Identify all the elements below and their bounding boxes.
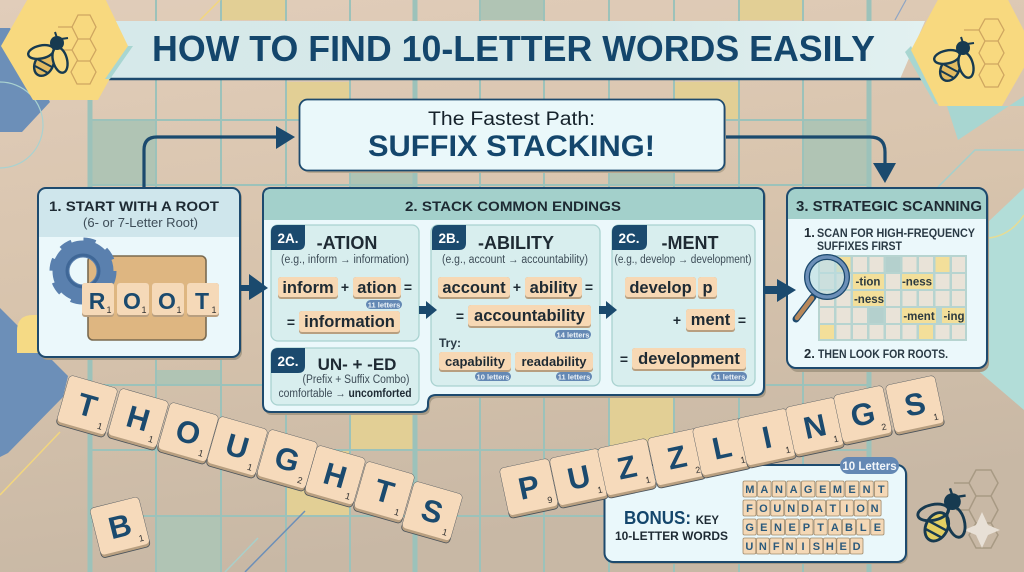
tiles: THOUGHTS: 1 (147, 434, 155, 445)
title banner (108, 21, 925, 79)
word tiles: management: A (790, 484, 798, 496)
tiles: THOUGHTS: T (370, 472, 398, 511)
sub-panel 2C: -ment: 11 letters (713, 372, 745, 382)
root letter tiles: O (158, 288, 176, 314)
step 1 text: SUFFIXES FIRST (817, 241, 902, 253)
tiles: THOUGHTS: S (417, 492, 447, 531)
arrow: step 1 to step 2 (240, 274, 268, 300)
sub-panel 2C: un- + -ed: (Prefix + Suffix Combo) (302, 374, 410, 386)
root letter tiles: 1 (106, 305, 112, 315)
sub-panel 2A: -ation: 11 letters (368, 300, 400, 310)
tiles: PUZZLINGS: 1 (832, 433, 839, 444)
sub-panel 2B: -ability: readability (521, 354, 587, 369)
step 2 text (804, 346, 948, 361)
icon: bottom right bee with honeycomb (916, 470, 1000, 548)
word tiles: geneptable: E (789, 522, 796, 534)
root letter tiles: R (89, 288, 106, 314)
tiles: THOUGHTS: H (123, 399, 154, 438)
word tiles: unfnished: D (853, 541, 861, 553)
bonus heading: BONUS: KEY (624, 508, 719, 528)
panel: 2 stack common endings (263, 188, 766, 415)
tile: B (90, 497, 151, 558)
word tiles: unfnished: S (813, 541, 820, 553)
tiles: THOUGHTS: 1 (344, 491, 352, 502)
tiles: PUZZLINGS: 1 (644, 474, 651, 485)
sub-panel 2B: -ability: 10 letters (477, 372, 509, 382)
tiles: PUZZLINGS (499, 375, 945, 519)
tiles: THOUGHTS: T (73, 386, 101, 425)
sub-panel 2C: -ment: + (673, 312, 681, 328)
tile: B: B (105, 507, 135, 546)
tiles: THOUGHTS: 1 (96, 421, 104, 432)
icon: magnifying glass (796, 257, 847, 319)
tiles: PUZZLINGS: 1 (596, 484, 603, 495)
root letter tiles: 1 (211, 305, 217, 315)
sub-panel 2C: -ment: = (620, 351, 628, 367)
letter grid: -tion (856, 276, 880, 288)
sub-panel 2A: -ation: (e.g., inform → information) (281, 254, 409, 266)
sub-panel 2C: un- + -ed: UN- + -ED (318, 355, 396, 374)
word tiles: unfnished: F (773, 541, 780, 553)
panel 2 heading: 2. STACK COMMON ENDINGS (405, 198, 621, 214)
sub-panel 2B: -ability: 2B. (438, 231, 460, 246)
word tiles: management: E (848, 484, 856, 496)
tiles: THOUGHTS: 1 (197, 448, 205, 459)
word tiles: geneptable: B (845, 522, 853, 534)
icon: gear (53, 241, 113, 301)
word tiles: geneptable: N (774, 522, 782, 534)
sub-panel 2C: -ment: develop (629, 279, 692, 297)
panel 3 heading: 3. STRATEGIC SCANNING (796, 198, 982, 215)
10 letters tab (840, 457, 899, 474)
word tiles: unfnished: I (801, 541, 805, 553)
step 2 text: 2. (804, 346, 815, 361)
letter grid: -ness (854, 294, 884, 306)
tiles: PUZZLINGS: 2 (880, 421, 887, 432)
tiles: PUZZLINGS: 1 (932, 411, 939, 422)
sub-panel 2A: -ation: -ATION (317, 233, 377, 253)
sub-panel 2B: -ability (431, 225, 600, 386)
tiles: PUZZLINGS: N (800, 407, 829, 446)
letter grid (818, 255, 967, 341)
word tiles: foundation: I (845, 503, 848, 515)
sub-panel 2C: -ment: 2C. (618, 231, 640, 246)
sub-panel 2B: -ability: capability (445, 354, 506, 369)
sub-panel 2B: -ability: account (442, 279, 506, 297)
word tiles: management: M (745, 484, 754, 496)
sub-panel 2B: -ability: accountability (474, 307, 586, 325)
sub-panel 2C: un- + -ed (271, 348, 419, 405)
word tiles: foundation: O (759, 503, 768, 515)
word tiles: geneptable: L (860, 522, 867, 534)
step 1 text (804, 225, 975, 253)
sub-panel 2C: -ment: (e.g., develop → development) (614, 254, 752, 266)
sub-panel 2C: -ment: development (638, 350, 740, 368)
root letter tiles: O (123, 288, 141, 314)
root letter tiles: 1 (176, 305, 182, 315)
tile: B: 1 (138, 533, 145, 544)
word tiles: foundation (743, 500, 881, 516)
tiles: THOUGHTS: 1 (441, 527, 449, 538)
arrow: 2B to 2C (599, 301, 617, 319)
word tiles: geneptable: E (874, 522, 881, 534)
word tiles: unfnished: E (840, 541, 847, 553)
letter grid: -ing (943, 311, 965, 323)
tiles: PUZZLINGS: S (901, 385, 929, 424)
word tiles: management: E (819, 484, 826, 496)
word tiles: management: M (833, 484, 842, 496)
callout heading: SUFFIX STACKING! (368, 130, 655, 163)
tiles: PUZZLINGS: U (564, 458, 593, 497)
word tiles: management: N (775, 484, 783, 496)
tiles: PUZZLINGS: 2 (694, 464, 701, 475)
callout subtitle: The Fastest Path: (428, 109, 595, 130)
sub-panel 2A: -ation: information (304, 313, 395, 331)
sub-panel 2B: -ability: = (456, 308, 464, 324)
root letter tiles: T (195, 288, 209, 314)
word tiles: unfnished: N (759, 541, 767, 553)
sub-panel 2A: -ation: ation (357, 279, 397, 297)
wood board (88, 256, 206, 340)
word tiles: unfnished: U (745, 541, 753, 553)
word tiles: foundation: T (830, 503, 837, 515)
tiles: PUZZLINGS: 1 (739, 454, 746, 465)
tiles: PUZZLINGS: Z (664, 438, 690, 477)
root letter tiles (82, 283, 219, 317)
word tiles: unfnished: N (786, 541, 794, 553)
word tiles: management: T (878, 484, 885, 496)
sub-panel 2A: -ation: = (404, 279, 412, 295)
tiles: THOUGHTS: G (271, 439, 304, 480)
bonus subheading: 10-LETTER WORDS (615, 529, 728, 543)
word tiles: geneptable: A (831, 522, 839, 534)
panel: bonus key words (604, 457, 908, 564)
word tiles: unfnished (743, 538, 863, 554)
sub-panel 2A: -ation: 2A. (277, 231, 299, 246)
sub-panel 2C: -ment (612, 225, 755, 386)
arrow: fastest path to scanning (725, 137, 896, 183)
tiles: THOUGHTS: H (320, 456, 351, 495)
sub-panel 2C: un- + -ed: 2C. (277, 354, 299, 369)
sub-panel 2C: un- + -ed: comfortable → uncomforted (278, 388, 412, 400)
panel: 3 strategic scanning (787, 188, 989, 372)
panel 1 heading: 1. START WITH A ROOT (49, 198, 219, 214)
sub-panel 2B: -ability: = (585, 279, 593, 295)
step 2 text: THEN LOOK FOR ROOTS. (818, 349, 948, 361)
panel: 1 start with a root (38, 188, 242, 360)
tiles: THOUGHTS (56, 375, 463, 544)
root letter tiles: 1 (141, 305, 147, 315)
sub-panel 2A: -ation: inform (282, 279, 334, 297)
step 1 text: 1. (804, 225, 815, 240)
arrow: root to fastest path (144, 126, 295, 187)
word tiles: foundation: U (773, 503, 781, 515)
arrow: 2A to 2B (419, 301, 437, 319)
icon: right bee hexagon (905, 0, 1024, 106)
word tiles: geneptable: E (760, 522, 767, 534)
word tiles: geneptable: T (817, 522, 824, 534)
sub-panel 2B: -ability: Try: (439, 336, 461, 350)
word tiles: foundation: N (787, 503, 795, 515)
tiles: PUZZLINGS: G (847, 395, 878, 434)
sub-panel 2B: -ability: + (513, 279, 521, 295)
panel 1 subheading: (6- or 7-Letter Root) (83, 215, 198, 230)
step 1 text: SCAN FOR HIGH-FREQUENCY (817, 228, 975, 240)
tiles: THOUGHTS: 2 (296, 475, 304, 486)
tiles: PUZZLINGS: L (709, 428, 735, 467)
tiles: PUZZLINGS: P (515, 468, 543, 507)
sub-panel 2C: -ment: = (738, 312, 746, 328)
word tiles: foundation: A (815, 503, 823, 515)
letter grid: -ness (902, 276, 932, 288)
sub-panel 2B: -ability: (e.g., account → accountability) (442, 254, 588, 266)
word tiles: unfnished: H (826, 541, 834, 553)
word tiles: foundation: F (746, 503, 753, 515)
word tiles: geneptable: P (803, 522, 810, 534)
word tiles: management: A (760, 484, 768, 496)
tiles: THOUGHTS: U (222, 427, 253, 466)
sub-panel 2B: -ability: ability (530, 279, 578, 297)
word tiles: foundation: O (856, 503, 865, 515)
tiles: THOUGHTS: 1 (393, 507, 401, 518)
10 letters tab: 10 Letters (842, 461, 897, 473)
sub-panel 2C: -ment: p (702, 279, 713, 297)
sub-panel 2C: -ment: -MENT (662, 233, 718, 253)
sub-panel 2C: -ment: ment (691, 311, 731, 329)
word tiles: geneptable: G (745, 522, 754, 534)
sub-panel 2B: -ability: -ABILITY (478, 233, 554, 253)
callout: the fastest path (300, 100, 726, 173)
tiles: THOUGHTS: O (172, 412, 205, 453)
word tiles: management: N (863, 484, 871, 496)
tiles: PUZZLINGS: I (759, 419, 775, 456)
arrow: step 2 to step 3 (764, 279, 796, 302)
sub-panel 2A: -ation (271, 225, 419, 341)
sub-panel 2A: -ation: = (287, 314, 295, 330)
tiles: PUZZLINGS: 1 (784, 444, 791, 455)
letter grid: -ment (903, 311, 935, 323)
sub-panel 2B: -ability: 11 letters (558, 372, 590, 382)
decorative colour shapes (0, 28, 1024, 457)
tiles: PUZZLINGS: 9 (546, 494, 553, 505)
tiles: THOUGHTS: 1 (246, 462, 254, 473)
icon: left bee hexagon (1, 0, 133, 100)
word tiles: management (743, 481, 888, 497)
word tiles: management: G (804, 484, 812, 496)
word tiles: foundation: N (871, 503, 879, 515)
sub-panel 2B: -ability: 14 letters (557, 330, 589, 340)
word tiles: geneptable (743, 519, 884, 535)
word tiles: foundation: D (801, 503, 809, 515)
title: HOW TO FIND 10-LETTER WORDS EASILY (152, 28, 875, 69)
tiles: PUZZLINGS: Z (614, 448, 640, 487)
sub-panel 2A: -ation: + (341, 279, 349, 295)
